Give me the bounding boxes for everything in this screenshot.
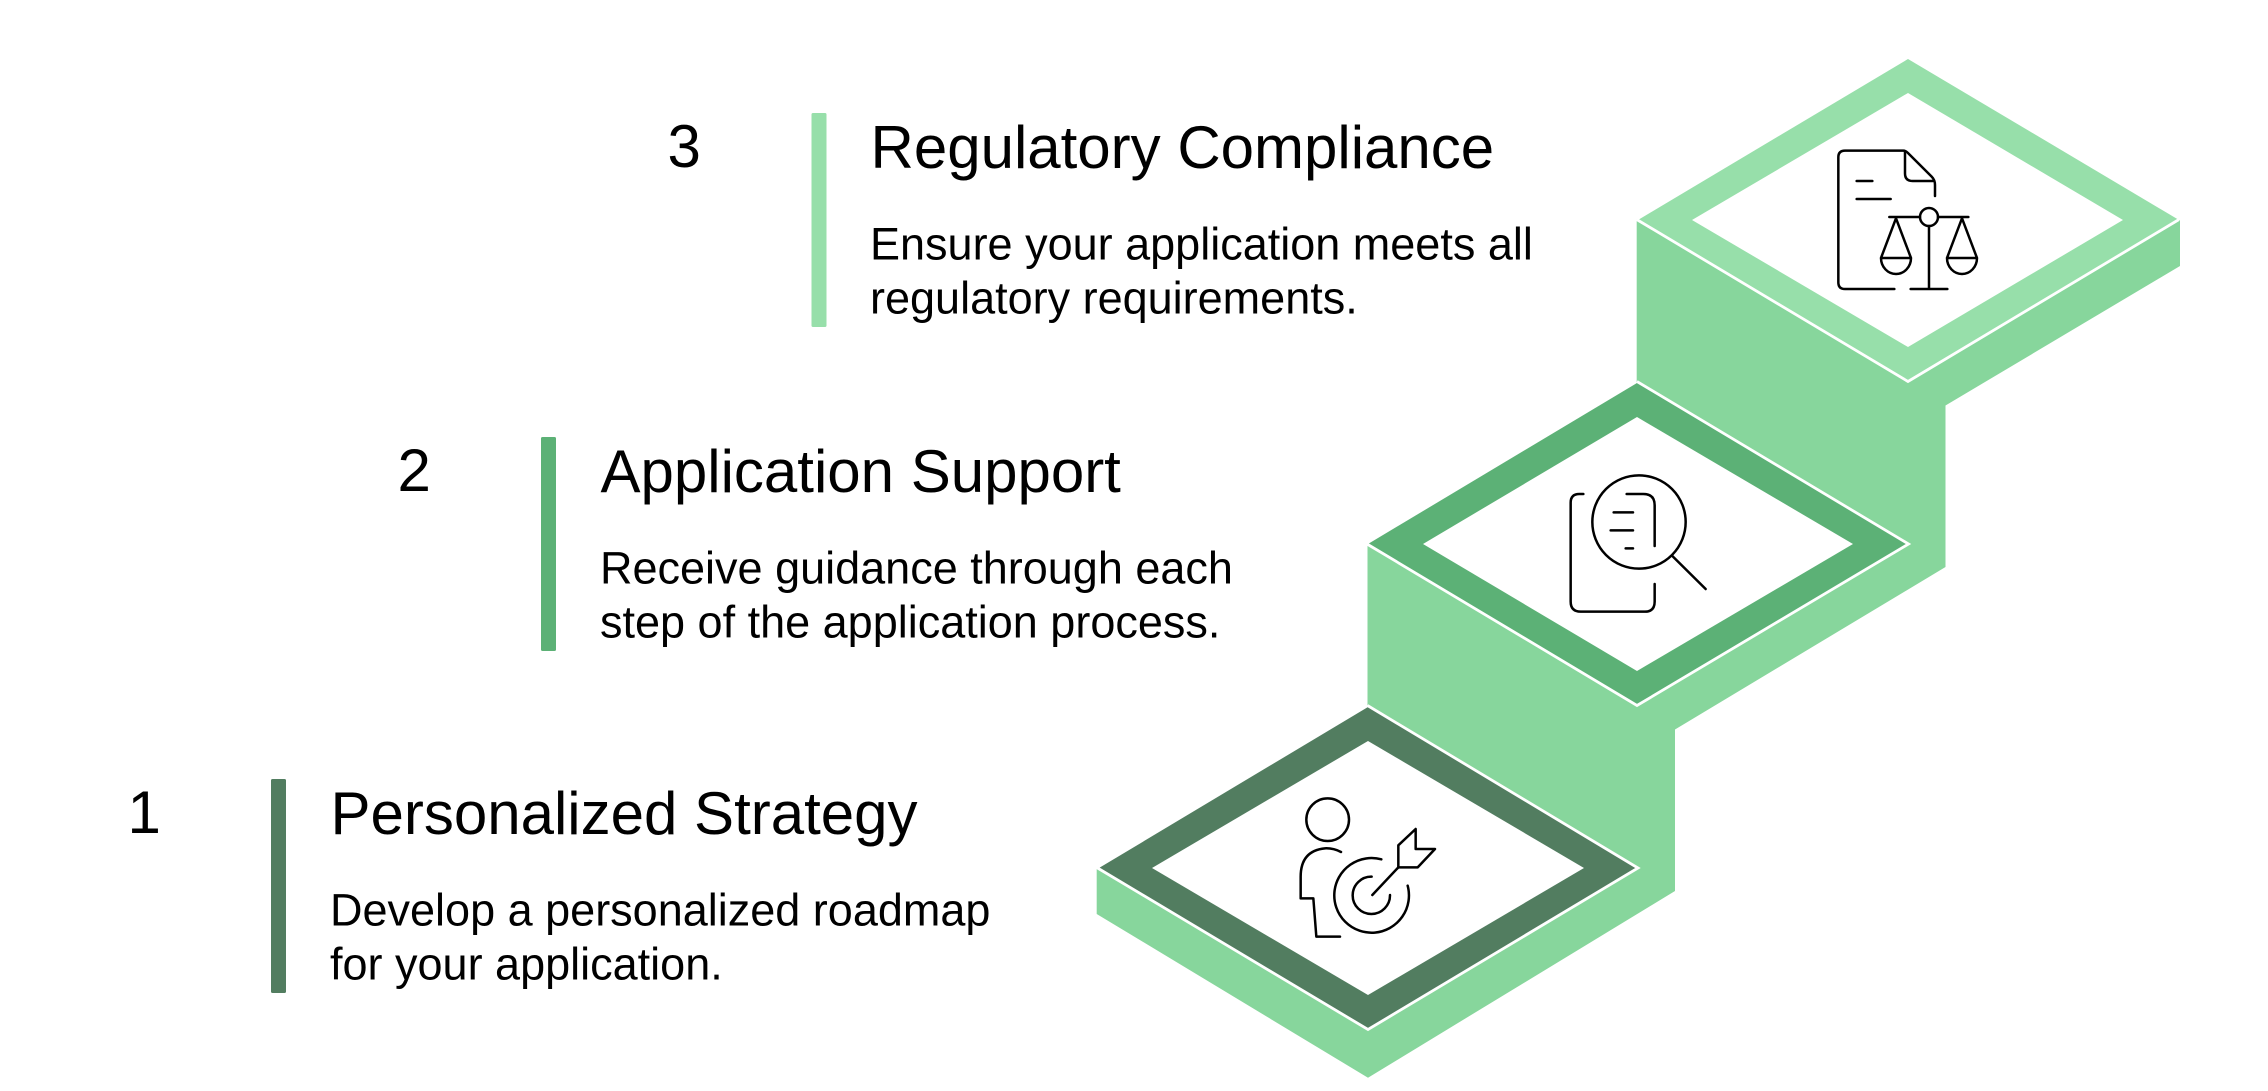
accent bar 1 [271,779,286,993]
staircase body [1097,220,2180,1078]
heading: Application Support: Application Support [600,438,1121,505]
accent bar 2 [541,437,556,651]
step 1 platform [1097,706,1638,1030]
number 1: 1 [128,779,161,846]
icon: document under magnifying glass [1571,475,1706,612]
step 1 text block [128,779,990,993]
number 2: 2 [398,437,431,504]
heading: Regulatory Compliance: Regulatory Compliance [870,114,1494,181]
description 2: step of the application process. [600,596,1220,648]
number 3: 3 [668,113,701,180]
step 2 text block [398,437,1233,651]
step 2 platform [1367,382,1908,706]
step 3 platform [1637,59,2179,382]
icon: person with target [1301,798,1435,937]
description 2: Receive guidance through each [600,542,1233,594]
description 3: regulatory requirements. [870,272,1358,324]
description 1: for your application. [330,938,723,990]
description 3: Ensure your application meets all [870,218,1533,270]
step 3 text block [668,113,1533,327]
icon: document with scales [1838,151,1977,289]
description 1: Develop a personalized roadmap [330,884,990,936]
accent bar 3 [812,113,826,327]
heading: Personalized Strategy: Personalized Strategy [330,780,918,847]
